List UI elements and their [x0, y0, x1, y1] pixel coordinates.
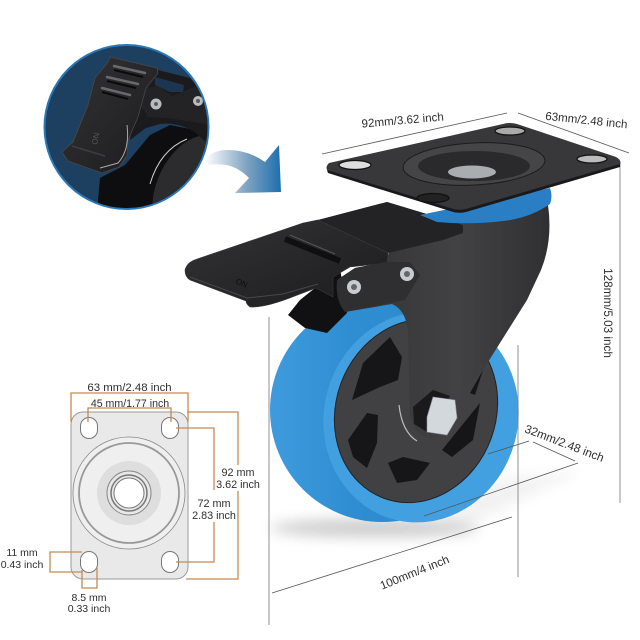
dimension: 92mm width: 92mm/3.62 inch [361, 110, 444, 131]
label: 92 mm [216, 467, 260, 491]
dimension: 100mm diameter [272, 517, 512, 593]
wheel side ring [300, 290, 542, 544]
vertical guide lines [269, 162, 620, 625]
inset: brake pedal: ON [90, 132, 101, 145]
inset: brake pedal [62, 57, 158, 173]
plate drawing [71, 412, 188, 579]
wheel tread [270, 298, 494, 522]
dimension: 63mm depth [518, 110, 629, 153]
plate drawing dimension brackets [50, 393, 238, 588]
label: 92 mm: 3.62 inch [216, 479, 260, 491]
brake pedal underside [288, 268, 347, 333]
brake pedal [185, 220, 388, 307]
dimension: 128mm height: 128mm/5.03 inch [601, 268, 614, 358]
label: 72 mm: 72 mm [198, 498, 231, 510]
label: 11 mm: 0.43 inch [1, 559, 43, 571]
dimension: 32mm tread: 32mm/2.48 inch [523, 422, 606, 465]
blue swivel band [420, 188, 552, 223]
dimension: 32mm tread [424, 422, 606, 516]
label: 8.5 mm: 0.33 inch [68, 603, 110, 615]
label: 72 mm [192, 498, 236, 522]
label: 11 mm: 11 mm [6, 547, 38, 559]
label: 8.5 mm: 8.5 mm [71, 592, 107, 604]
wheel hub [309, 296, 523, 526]
label: 63 mm: 63 mm/2.48 inch [87, 382, 172, 394]
arrow: points to caster [205, 145, 281, 193]
bracket pivot plate [337, 262, 420, 312]
plate drawing center rings [73, 437, 185, 549]
icon: bracket rivets [347, 267, 414, 294]
label: 11 mm [1, 547, 43, 571]
label: 8.5 mm [68, 592, 110, 615]
mounting plate [326, 123, 620, 213]
label: 72 mm: 2.83 inch [192, 510, 236, 522]
ground shadow [270, 470, 585, 537]
bracket top surface [318, 202, 463, 253]
caster bracket [318, 202, 549, 438]
plate center ring [402, 139, 546, 189]
dimension: 63mm depth: 63mm/2.48 inch [545, 110, 628, 131]
label: 45 mm: 45 mm/1.77 inch [91, 398, 169, 410]
brake pedal: ON [234, 277, 249, 290]
dimension: 92mm width [322, 110, 507, 154]
plate drawing holes [80, 418, 178, 572]
dimension: 100mm diameter: 100mm/4 inch [378, 553, 451, 593]
plate center pin [448, 166, 496, 178]
right guide line [517, 345, 519, 577]
inset: brake detail circle [44, 44, 210, 210]
icon: inset rivets [150, 96, 203, 110]
plate holes [339, 127, 607, 202]
bracket axle bolt [399, 390, 457, 441]
caster wheel [270, 290, 542, 544]
label: 92 mm: 92 mm [222, 467, 255, 479]
